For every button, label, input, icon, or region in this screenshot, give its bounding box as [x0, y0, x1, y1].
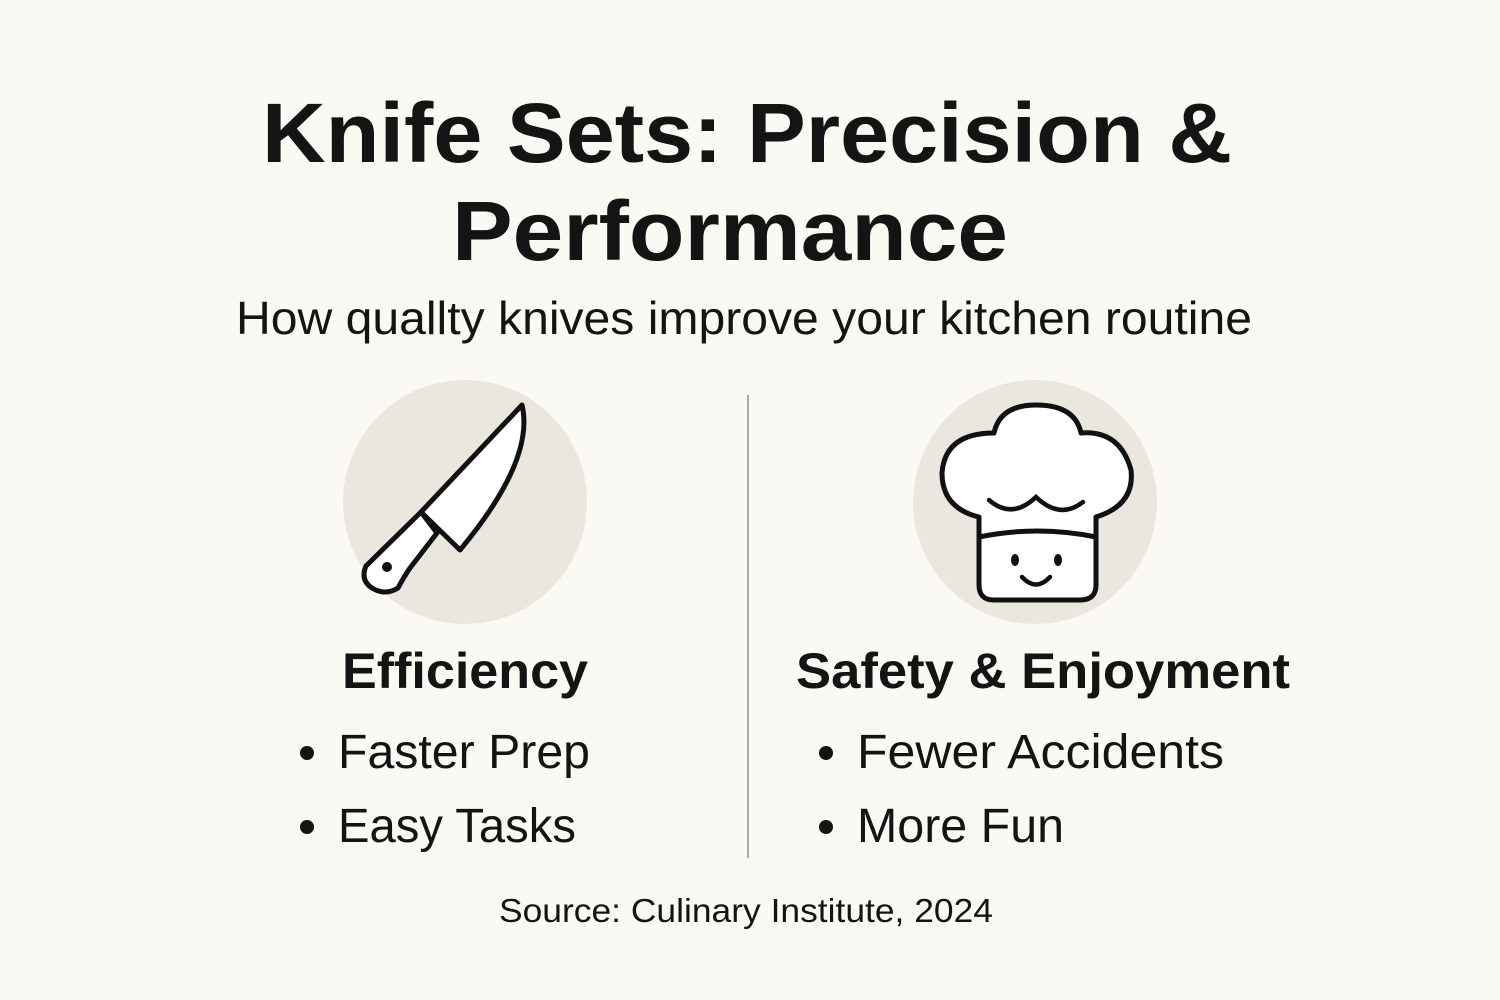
bullet list: safety	[819, 726, 1224, 853]
panel: safety	[796, 380, 1290, 853]
bullet list: safety: More Fun	[857, 800, 1064, 853]
icon: chef hat	[913, 380, 1157, 624]
bullet list: efficiency: Easy Tasks	[338, 800, 576, 853]
panel: efficiency	[300, 380, 590, 853]
source: Source: Culinary Institute, 2024	[499, 892, 993, 929]
bullet list: safety: Fewer Accidents	[857, 726, 1224, 779]
subtitle: How quallty knives improve your kitchen routine	[236, 292, 1252, 344]
icon: knife	[343, 380, 587, 624]
title	[262, 86, 1232, 278]
heading: safety: Safety & Enjoyment	[796, 643, 1290, 699]
divider	[747, 395, 749, 858]
bullet list: efficiency: Faster Prep	[338, 726, 590, 779]
title: Knife Sets: Precision &	[262, 86, 1232, 180]
bullet list: efficiency	[300, 726, 590, 853]
title: Performance	[452, 184, 1008, 278]
heading: efficiency: Efficiency	[342, 643, 588, 699]
